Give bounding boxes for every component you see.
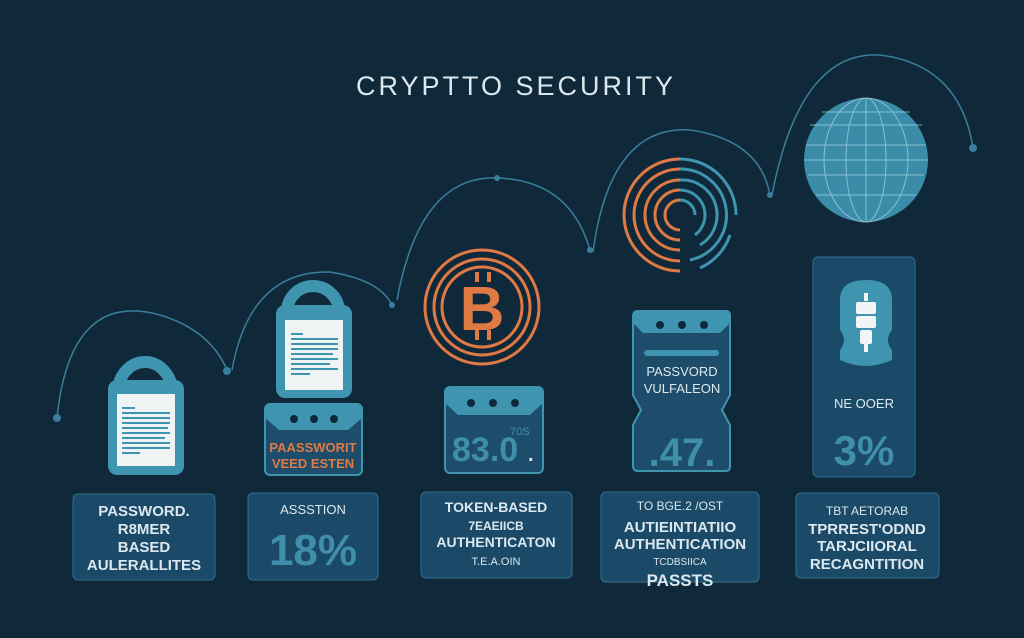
keypad 3 — [445, 387, 543, 473]
label box 3: AUTHENTICATON — [436, 534, 556, 550]
label box 2: ASSSTION — [280, 502, 346, 517]
label box 3 — [421, 492, 572, 578]
label box 1 — [73, 494, 215, 580]
label box 3: 7EAEIICB — [468, 519, 524, 533]
panel: password lock — [73, 362, 215, 580]
icon: chain — [840, 280, 892, 366]
panel: assertion — [248, 286, 378, 580]
keypad 3: 70S — [510, 426, 530, 438]
label box 4: TO BGE.2 /OST — [637, 499, 724, 513]
label box 3: T.E.A.OIN — [472, 556, 521, 568]
panel: token-based — [421, 250, 572, 578]
panel box 4: PASSVORD — [646, 364, 718, 379]
label box 4: PASSTS — [647, 571, 713, 590]
label box 5 — [796, 493, 939, 578]
keypad 2: PAASSWORIT — [269, 440, 357, 455]
keypad 3: . — [528, 444, 534, 466]
panel box 5: 3% — [834, 427, 894, 474]
panel box 4: VULFALEON — [644, 381, 720, 396]
label box 1: PASSWORD. — [98, 503, 190, 520]
panel box 5 — [813, 257, 915, 477]
icon: lock 2 — [276, 286, 352, 398]
keypad 2: VEED ESTEN — [272, 456, 354, 471]
label box 3: TOKEN-BASED — [445, 499, 547, 515]
label box 4 — [601, 492, 759, 590]
keypad 2 — [265, 404, 362, 475]
label box 1: BASED — [118, 539, 170, 556]
label box 5: TPRREST'ODND — [808, 521, 926, 538]
title: CRYPTTO SECURITY — [356, 71, 676, 101]
label box 1: R8MER — [118, 521, 170, 538]
icon: bitcoin — [425, 250, 539, 364]
label box 2: 18% — [269, 526, 357, 575]
icon: globe — [804, 98, 928, 222]
panel box 4: .47. — [649, 431, 715, 475]
label box 5: TBT AETORAB — [826, 504, 908, 518]
label box 4: AUTHENTICATION — [614, 536, 746, 553]
icon: lock 1 — [108, 362, 184, 475]
label box 5: RECAGNTITION — [810, 556, 924, 573]
panel: recognition — [796, 98, 939, 578]
label box 5: TARJCIIORAL — [817, 538, 917, 555]
panel box 5: NE OOER — [834, 396, 894, 411]
arrow: connecting arcs — [53, 55, 977, 422]
label box 4: TCDBSIICA — [653, 557, 707, 568]
icon: bitcoin: B — [460, 275, 504, 344]
keypad 3: 83.0 — [452, 431, 518, 469]
panel: authentication vulnerability — [601, 159, 759, 590]
panel box 4 — [633, 311, 730, 475]
label box 1: AULERALLITES — [87, 557, 201, 574]
icon: fingerprint arcs — [624, 159, 736, 271]
label box 4: AUTIEINTIATIIO — [624, 519, 736, 536]
label box 2 — [248, 493, 378, 580]
